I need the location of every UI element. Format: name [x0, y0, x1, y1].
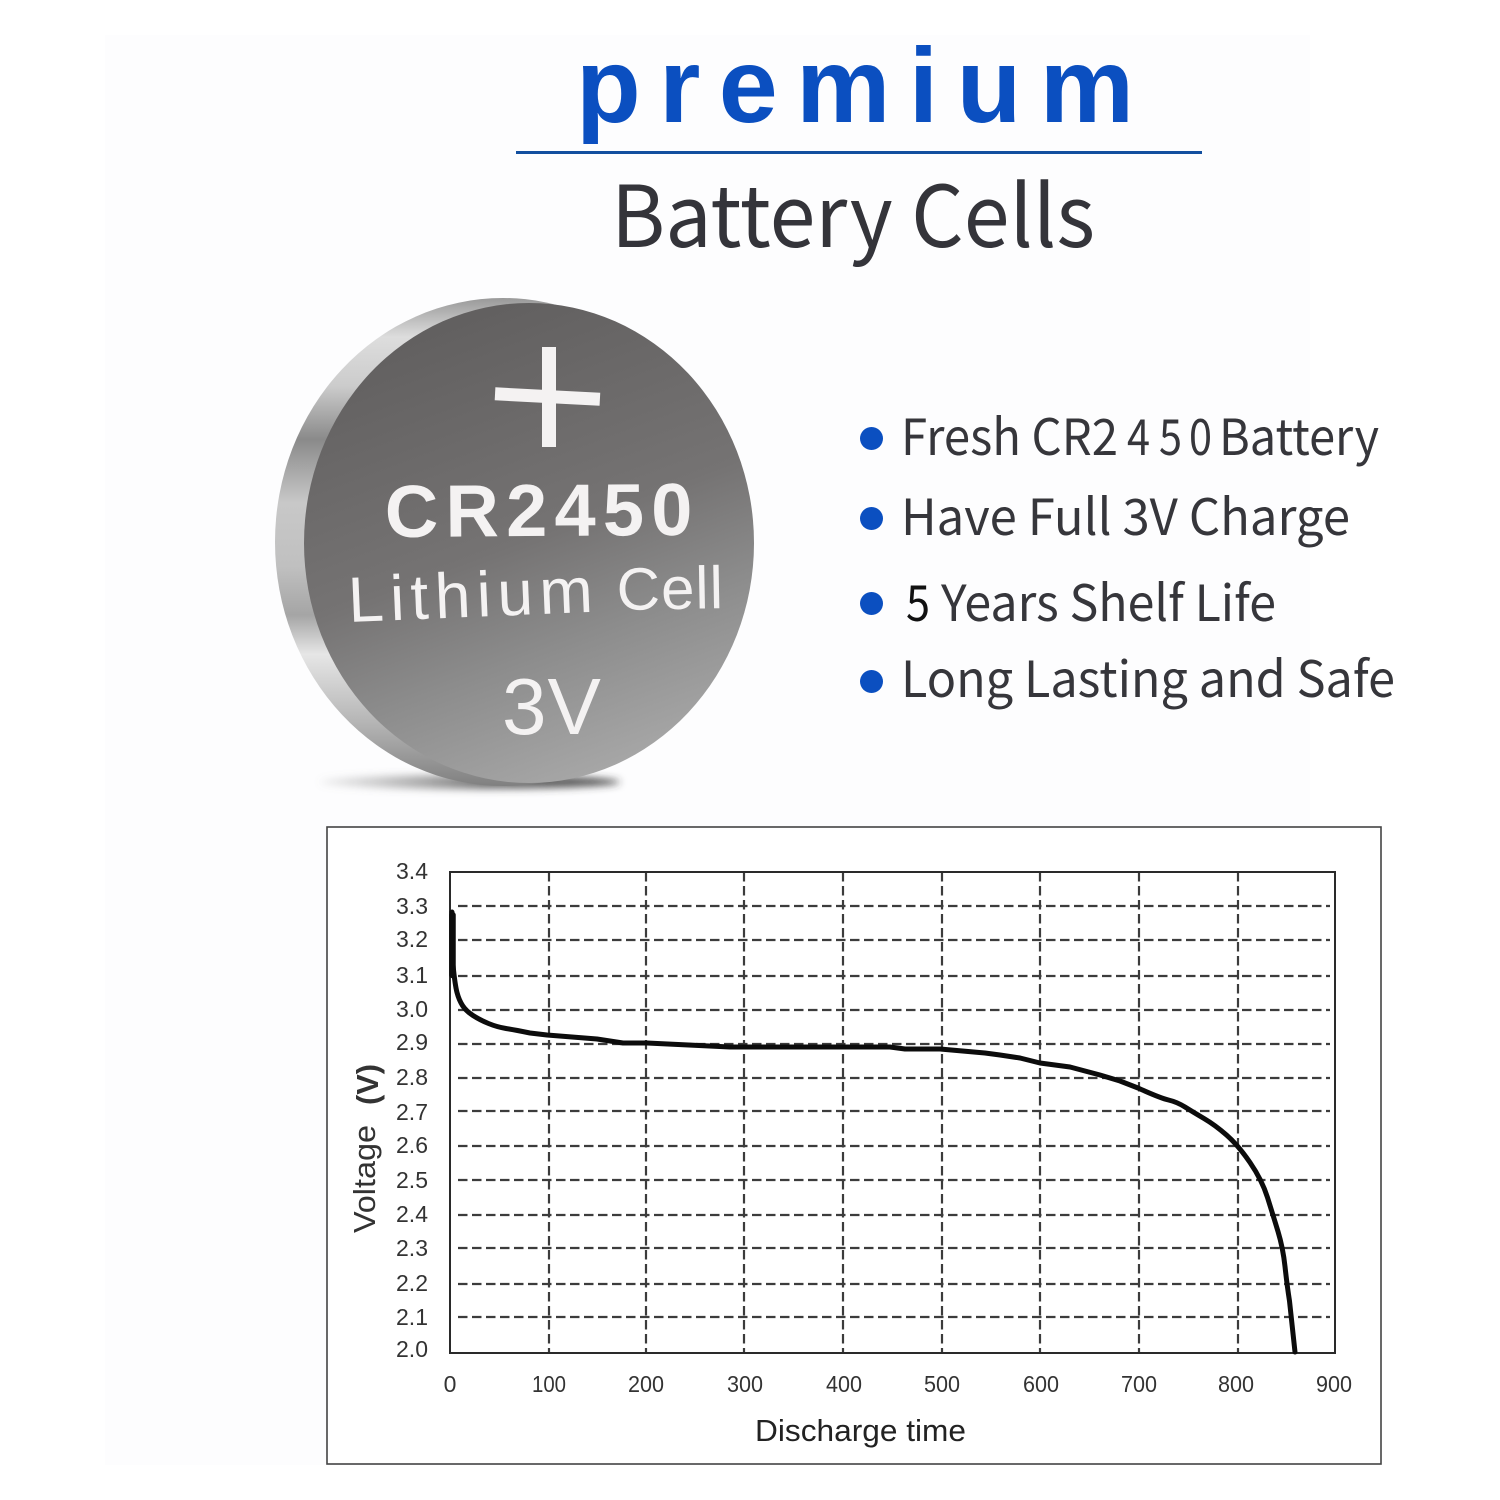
x axis title: Discharge time	[755, 1413, 966, 1448]
feature bullet 1	[901, 398, 1379, 470]
x axis labels: 400	[826, 1371, 862, 1397]
y axis labels: 3.4	[396, 858, 428, 884]
title: premium: premium	[576, 27, 1152, 145]
icon: coin cell battery	[275, 298, 754, 796]
y axis labels: 2.3	[396, 1235, 428, 1261]
feature bullet 2: Have Full 3V Charge	[901, 478, 1350, 550]
y axis labels: 2.8	[396, 1064, 428, 1090]
bullet dots	[860, 427, 883, 693]
x axis labels: 700	[1121, 1371, 1157, 1397]
y axis labels: 3.2	[396, 926, 428, 952]
y axis labels: 2.2	[396, 1270, 428, 1296]
y axis labels: 2.1	[396, 1304, 428, 1330]
x axis labels: 600	[1023, 1371, 1059, 1397]
line chart: discharge curve	[326, 826, 1382, 1465]
y axis title: (V)	[350, 1064, 385, 1105]
y axis labels: 2.4	[396, 1201, 428, 1227]
feature bullet 3: 5	[906, 564, 930, 636]
icon: coin cell battery: Lithium	[347, 554, 600, 636]
y axis labels: 3.0	[396, 996, 428, 1022]
feature list	[901, 405, 1395, 712]
x axis labels: 100	[532, 1371, 566, 1397]
y axis labels: 2.9	[396, 1029, 428, 1055]
background panel	[105, 35, 1310, 1465]
x axis labels	[444, 1371, 1352, 1397]
y axis labels: 2.6	[396, 1132, 428, 1158]
x axis labels: 900	[1316, 1371, 1352, 1397]
x axis labels: 500	[924, 1371, 960, 1397]
discharge curve	[452, 912, 1295, 1352]
x axis labels: 800	[1218, 1371, 1254, 1397]
y axis labels	[396, 858, 428, 1362]
x axis labels: 0	[444, 1371, 456, 1397]
feature bullet 4: Long Lasting and Safe	[901, 640, 1395, 712]
icon: coin cell battery: Cell	[616, 554, 725, 623]
x axis labels: 200	[628, 1371, 664, 1397]
plus sign	[495, 347, 600, 447]
title underline	[516, 151, 1202, 154]
feature bullet 3: Years Shelf Life	[940, 564, 1276, 636]
y axis labels: 2.7	[396, 1099, 428, 1125]
y axis labels: 3.1	[396, 962, 428, 988]
y axis labels: 2.5	[396, 1167, 428, 1193]
x axis labels: 300	[727, 1371, 763, 1397]
y axis title: Voltage	[347, 1125, 382, 1233]
y axis labels: 3.3	[396, 893, 428, 919]
y axis labels: 2.0	[396, 1336, 428, 1362]
icon: coin cell battery: CR2450	[385, 468, 700, 553]
icon: coin cell battery: 3V	[502, 662, 602, 751]
y axis title	[347, 1064, 385, 1233]
